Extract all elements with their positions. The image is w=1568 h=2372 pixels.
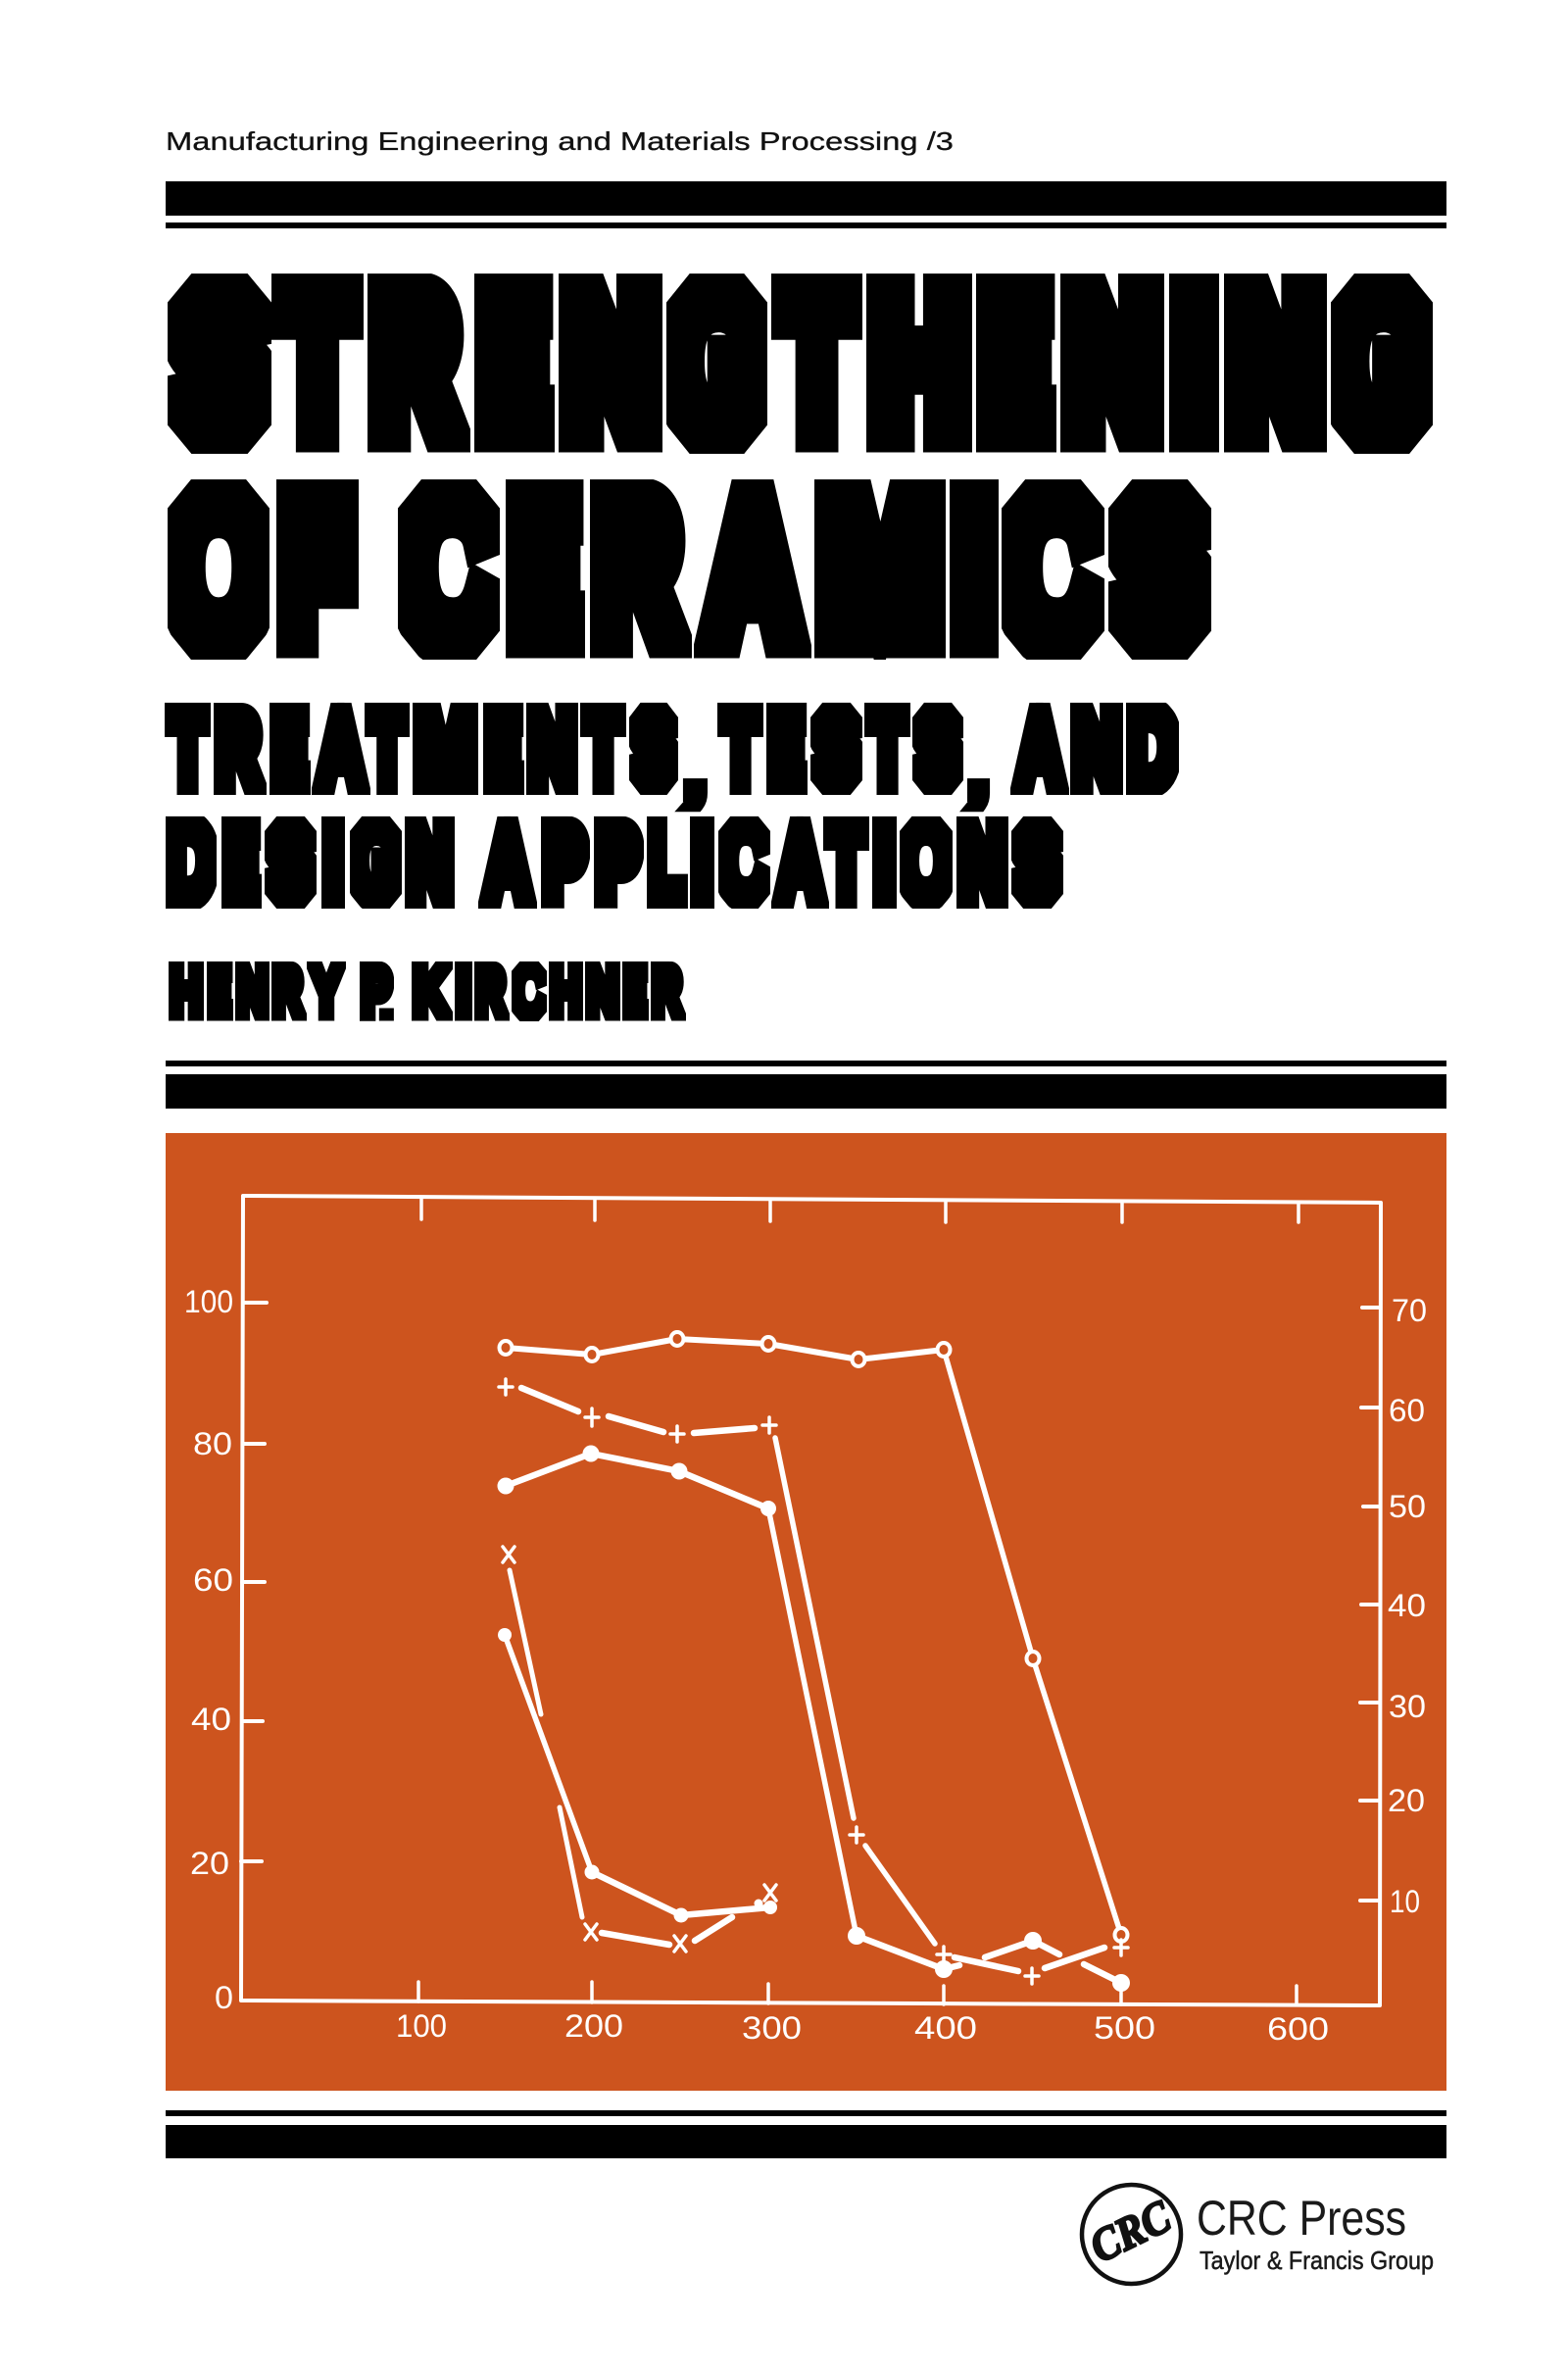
title line 2: M bbox=[821, 460, 939, 677]
subtitle line 2: L bbox=[649, 807, 683, 918]
subtitle line 2: C bbox=[717, 800, 771, 924]
author name: Y bbox=[312, 955, 341, 1028]
title line 2: S bbox=[1108, 446, 1212, 690]
title line 2: C bbox=[396, 446, 502, 690]
bottom axis labels: 100 bbox=[396, 2008, 447, 2044]
title line 1: G bbox=[1329, 240, 1438, 484]
title line 1: E bbox=[479, 254, 547, 471]
author name: E bbox=[623, 955, 647, 1028]
subtitle line 1: S bbox=[810, 686, 862, 811]
title line 2: C bbox=[1000, 446, 1106, 690]
subtitle line 2: A bbox=[778, 807, 822, 918]
left axis labels: 80 bbox=[193, 1426, 232, 1461]
bottom axis labels bbox=[396, 2008, 1329, 2047]
series: plus markers bbox=[499, 1379, 1128, 1984]
author name: H bbox=[171, 955, 202, 1028]
bottom axis labels: 200 bbox=[564, 2008, 623, 2044]
title line 1: H bbox=[872, 254, 966, 471]
author name: N bbox=[237, 955, 268, 1028]
subtitle line 1: , bbox=[969, 736, 988, 809]
title line 2: F bbox=[281, 460, 351, 677]
series: x markers bbox=[503, 1547, 776, 1952]
author name: K bbox=[414, 955, 448, 1028]
subtitle line 1 bbox=[165, 702, 1179, 812]
right axis labels: 10 bbox=[1390, 1884, 1420, 1919]
title line 1: R bbox=[372, 254, 457, 471]
middle rule thick bbox=[166, 1074, 1446, 1109]
author name: P bbox=[362, 955, 391, 1028]
author name: C bbox=[511, 950, 548, 1032]
right axis labels: 20 bbox=[1388, 1783, 1425, 1818]
title line 1: I bbox=[1176, 254, 1212, 471]
subtitle line 1: T bbox=[870, 693, 905, 805]
title line 1 bbox=[168, 273, 1433, 454]
title line 1: N bbox=[1230, 254, 1321, 471]
bottom axis labels: 500 bbox=[1094, 2010, 1155, 2046]
subtitle line 2: N bbox=[959, 807, 1005, 918]
author name bbox=[169, 961, 686, 1034]
subtitle line 2: P bbox=[597, 807, 639, 918]
subtitle line 2: P bbox=[544, 807, 585, 918]
subtitle line 1: E bbox=[485, 693, 520, 805]
title line 2: E bbox=[511, 460, 577, 677]
subtitle line 2: O bbox=[899, 800, 954, 924]
bottom axis labels: 600 bbox=[1267, 2011, 1329, 2047]
title line 2: R bbox=[595, 460, 678, 677]
title line 1: T bbox=[282, 254, 353, 471]
subtitle line 1: A bbox=[318, 693, 364, 805]
title line 2: A bbox=[709, 460, 797, 677]
middle rule thin bbox=[166, 1061, 1446, 1066]
subtitle line 2: A bbox=[485, 807, 530, 918]
left axis labels: 20 bbox=[190, 1846, 229, 1881]
author name: R bbox=[476, 955, 505, 1028]
title line 1: G bbox=[664, 240, 772, 484]
series: filled large markers bbox=[498, 1445, 1130, 2004]
right axis labels bbox=[1388, 1293, 1427, 1919]
subtitle line 1: S bbox=[912, 686, 963, 811]
publisher logo bbox=[1080, 2182, 1434, 2286]
subtitle line 2 bbox=[166, 815, 1063, 909]
subtitle line 1: M bbox=[416, 693, 475, 805]
top rule thick bbox=[166, 181, 1446, 216]
bottom axis labels: 400 bbox=[914, 2010, 977, 2046]
icon: CRC circle seal: CRC bbox=[1082, 2191, 1179, 2273]
title line 2: O bbox=[166, 446, 271, 690]
subtitle line 2: G bbox=[349, 800, 404, 924]
top rule thin bbox=[166, 222, 1446, 228]
subtitle line 1: N bbox=[1073, 693, 1120, 805]
subtitle line 1: T bbox=[723, 693, 758, 805]
subtitle line 2: E bbox=[223, 807, 258, 918]
right axis labels: 70 bbox=[1392, 1293, 1427, 1328]
author name: H bbox=[551, 955, 581, 1028]
author name: I bbox=[457, 955, 470, 1028]
left axis labels: 40 bbox=[191, 1702, 231, 1737]
subtitle line 1: T bbox=[586, 693, 620, 805]
subtitle line 1: T bbox=[171, 693, 205, 805]
chart frame bbox=[241, 1196, 1381, 2005]
title line 1: E bbox=[981, 254, 1049, 471]
subtitle line 1: , bbox=[686, 736, 705, 809]
subtitle line 1: S bbox=[629, 686, 678, 811]
series: open circles bbox=[500, 1332, 1127, 1942]
subtitle line 2: S bbox=[1011, 800, 1063, 924]
right axis labels: 30 bbox=[1389, 1689, 1426, 1724]
left axis labels: 100 bbox=[184, 1284, 233, 1319]
title line 1: T bbox=[782, 254, 852, 471]
subtitle line 2: N bbox=[408, 807, 452, 918]
title line 1: N bbox=[564, 254, 657, 471]
author name: E bbox=[208, 955, 231, 1028]
subtitle line 2: S bbox=[265, 800, 317, 924]
panel: orange line chart bbox=[166, 1133, 1446, 2091]
publisher name: CRC Press bbox=[1197, 2191, 1406, 2246]
title line 1: S bbox=[168, 240, 272, 484]
bottom rule thick bbox=[166, 2125, 1446, 2158]
subtitle line 2: D bbox=[165, 800, 216, 924]
author name: R bbox=[653, 955, 681, 1028]
subtitle line 2: I bbox=[693, 807, 711, 918]
right axis labels: 50 bbox=[1389, 1489, 1426, 1524]
title line 2: I bbox=[956, 460, 992, 677]
subtitle line 1: D bbox=[1125, 686, 1178, 811]
title line 2 bbox=[168, 479, 1211, 660]
series heading: Manufacturing Engineering and Materials Processing /3 bbox=[166, 126, 954, 156]
subtitle line 1: A bbox=[1017, 693, 1062, 805]
left axis labels: 0 bbox=[215, 1980, 233, 2015]
subtitle line 2: T bbox=[829, 807, 863, 918]
subtitle line 2: I bbox=[875, 807, 894, 918]
subtitle line 2: I bbox=[324, 807, 342, 918]
subtitle line 1: T bbox=[370, 693, 404, 805]
bottom axis labels: 300 bbox=[742, 2010, 802, 2046]
left axis labels bbox=[184, 1284, 233, 2015]
right axis labels: 40 bbox=[1388, 1588, 1426, 1623]
series: filled small markers bbox=[498, 1628, 777, 1923]
subtitle line 1: R bbox=[217, 693, 260, 805]
subtitle line 1: E bbox=[768, 693, 804, 805]
bottom rule thin bbox=[166, 2110, 1446, 2116]
left axis labels: 60 bbox=[193, 1562, 233, 1598]
subtitle line 1: N bbox=[529, 693, 575, 805]
title line 1: N bbox=[1066, 254, 1158, 471]
subtitle line 1: E bbox=[271, 693, 307, 805]
author name: N bbox=[587, 955, 618, 1028]
right axis labels: 60 bbox=[1389, 1393, 1425, 1428]
author name: . bbox=[375, 961, 398, 1034]
author name: R bbox=[273, 955, 302, 1028]
